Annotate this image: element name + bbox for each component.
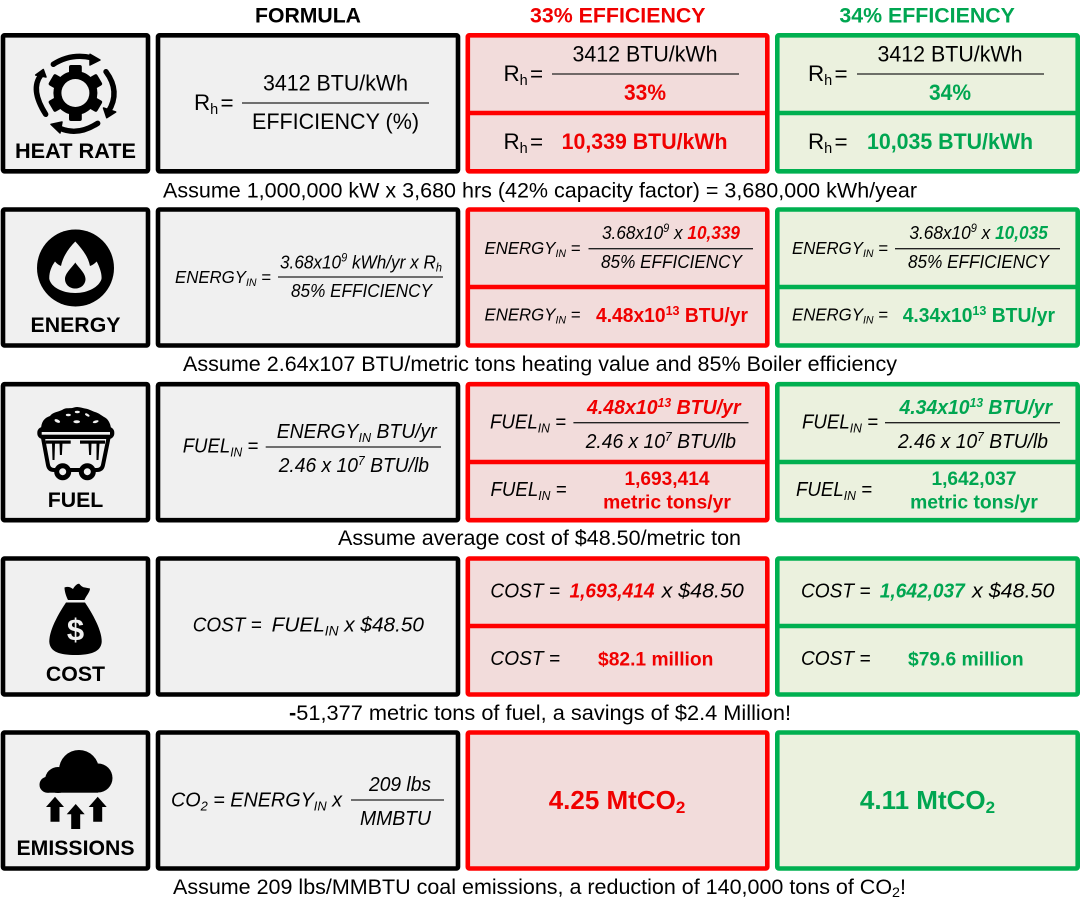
panel: heat rate formula: EFFICIENCY (%) (252, 109, 419, 134)
panel: emissions at 33% efficiency: 2 (676, 798, 685, 817)
panel: heat rate at 34% efficiency: R (808, 61, 824, 86)
panel: fuel at 33% efficiency: 4.48x10 (587, 397, 659, 419)
icon: cloud with rising arrows (40, 750, 112, 829)
panel: emissions at 34% efficiency (777, 732, 1078, 868)
label: cost: COST (46, 662, 105, 686)
panel: fuel formula: ENERGY (277, 421, 361, 443)
column heading: 33% efficiency: 33% EFFICIENCY (530, 4, 706, 28)
panel: energy at 33% efficiency: 10,339 (687, 223, 740, 243)
panel: cost formula: IN (325, 624, 339, 639)
panel: heat rate label (3, 35, 148, 171)
panel: fuel at 34% efficiency: IN (844, 488, 856, 503)
row: energy (3, 210, 1078, 346)
panel: emissions label (3, 732, 148, 868)
panel: cost formula: x $48.50 (339, 614, 425, 637)
panel: heat rate at 33% efficiency: h (520, 141, 528, 157)
panel: heat rate at 33% efficiency: h (520, 73, 528, 89)
panel: fuel at 33% efficiency: 13 (658, 396, 671, 410)
panel: energy at 33% efficiency: 13 (666, 303, 680, 318)
panel: energy formula: ENERGY (175, 267, 249, 287)
panel: energy at 33% efficiency: IN (555, 315, 566, 327)
row: emissions (3, 732, 1078, 868)
panel: fuel at 34% efficiency: 13 (970, 396, 983, 410)
icon: money bag (49, 584, 102, 655)
panel: fuel at 33% efficiency: metric tons/yr (603, 491, 731, 513)
panel: cost at 34% efficiency: COST = (801, 580, 871, 603)
panel: fuel formula: FUEL (183, 436, 234, 458)
panel: fuel formula: = (242, 436, 258, 458)
panel: fuel formula: 7 (358, 454, 366, 468)
panel: energy at 34% efficiency: 10,035 (995, 223, 1049, 243)
panel: heat rate formula: R (194, 90, 210, 115)
panel: cost formula: FUEL (272, 614, 324, 637)
panel: energy at 33% efficiency: 9 (663, 223, 670, 235)
panel: energy at 34% efficiency: = (874, 305, 888, 325)
panel: emissions formula: 209 lbs (368, 774, 431, 796)
row: cost (3, 558, 1078, 694)
panel: energy formula: kWh/yr x R (347, 253, 436, 273)
icon: gear with circular arrows (36, 54, 116, 133)
panel: energy at 34% efficiency: 9 (971, 223, 977, 235)
emissions reduction note: ! (900, 876, 906, 899)
label: fuel: FUEL (48, 488, 103, 512)
panel: heat rate at 34% efficiency: 34% (929, 80, 971, 105)
panel: heat rate formula (158, 35, 458, 171)
panel: heat rate at 34% efficiency (777, 35, 1078, 171)
column heading: formula: FORMULA (255, 4, 361, 28)
panel: energy at 33% efficiency: ENERGY (484, 305, 558, 325)
panel: fuel at 33% efficiency: 7 (665, 430, 673, 444)
panel: fuel at 33% efficiency: 2.46 x 10 (586, 431, 668, 453)
panel: energy at 33% efficiency: x (669, 223, 687, 243)
panel: heat rate formula: 3412 BTU/kWh (263, 71, 408, 96)
panel: energy at 33% efficiency: = (566, 238, 580, 258)
panel: cost formula (158, 558, 458, 694)
panel: energy at 33% efficiency: ENERGY (484, 238, 558, 258)
assumption note: fuel cost: Assume average cost of $48.50/metric ton (338, 527, 741, 550)
panel: heat rate at 33% efficiency: 33% (624, 80, 666, 105)
emissions reduction note: 2 (892, 884, 900, 900)
label: emissions: EMISSIONS (16, 836, 134, 860)
panel: cost label (3, 558, 148, 694)
panel: energy at 34% efficiency: 3.68x10 (909, 223, 973, 243)
panel: fuel at 33% efficiency: FUEL (490, 411, 541, 433)
panel: heat rate at 34% efficiency: = (828, 61, 848, 86)
panel: energy formula: IN (246, 277, 257, 289)
panel: energy at 33% efficiency (468, 210, 767, 346)
panel: fuel at 33% efficiency: IN (538, 488, 551, 503)
panel: fuel formula: BTU/lb (365, 455, 429, 477)
panel: emissions formula: CO (171, 790, 201, 812)
panel: cost formula: COST = (193, 614, 262, 637)
panel: heat rate at 33% efficiency: 10,339 BTU/kWh (562, 129, 728, 154)
panel: fuel at 33% efficiency: = (550, 411, 566, 433)
panel: fuel at 34% efficiency: 2.46 x 10 (898, 431, 980, 453)
panel: emissions formula: 2 (200, 799, 209, 814)
panel: cost at 34% efficiency: 1,642,037 (880, 581, 966, 603)
panel: emissions formula: = ENERGY (208, 790, 315, 812)
panel: cost at 33% efficiency: 1,693,414 (570, 581, 654, 603)
panel: energy at 34% efficiency: ENERGY (792, 238, 866, 258)
panel: emissions formula: MMBTU (360, 808, 432, 830)
panel: energy formula: = (257, 267, 271, 287)
panel: heat rate at 34% efficiency: R (808, 129, 824, 154)
panel: cost at 33% efficiency: x $48.50 (661, 580, 744, 603)
panel: emissions at 33% efficiency: 4.25 MtCO (549, 785, 676, 815)
panel: energy at 33% efficiency: IN (555, 248, 566, 260)
panel: cost at 34% efficiency: $79.6 million (908, 648, 1024, 670)
column heading: 34% efficiency: 34% EFFICIENCY (839, 4, 1015, 28)
panel: fuel at 34% efficiency: 4.34x10 (900, 397, 972, 419)
panel: fuel at 33% efficiency: = (550, 479, 566, 501)
panel: fuel formula: IN (358, 430, 372, 445)
panel: heat rate at 33% efficiency: = (524, 61, 543, 86)
panel: fuel at 34% efficiency: FUEL (802, 411, 853, 433)
panel: emissions at 34% efficiency: 2 (986, 798, 995, 817)
panel: energy at 34% efficiency (777, 210, 1078, 346)
panel: fuel at 34% efficiency: 7 (977, 430, 985, 444)
assumption note: heating value: Assume 2.64x107 BTU/metric tons heating value and 85% Boiler efficiency (183, 353, 897, 376)
panel: fuel at 34% efficiency: IN (850, 420, 862, 435)
panel: cost at 34% efficiency: COST = (801, 647, 871, 670)
panel: fuel at 34% efficiency: BTU/lb (984, 431, 1048, 453)
panel: energy formula: 3.68x10 (280, 253, 344, 273)
panel: energy formula (158, 210, 458, 346)
panel: cost at 33% efficiency: $82.1 million (598, 648, 713, 670)
panel: energy formula: h (436, 263, 442, 275)
panel: fuel at 33% efficiency: IN (538, 420, 550, 435)
panel: fuel at 34% efficiency (777, 384, 1078, 520)
panel: energy at 34% efficiency: 13 (972, 303, 986, 318)
panel: heat rate at 33% efficiency: R (504, 61, 520, 86)
panel: energy at 34% efficiency: IN (863, 248, 874, 260)
panel: fuel label (3, 384, 148, 520)
icon: coal cart (37, 407, 114, 478)
panel: cost at 33% efficiency (468, 558, 767, 694)
panel: heat rate at 33% efficiency (468, 35, 767, 171)
panel: fuel at 34% efficiency: = (862, 411, 878, 433)
panel: fuel at 34% efficiency: BTU/yr (983, 397, 1053, 419)
panel: emissions formula (158, 732, 458, 868)
panel: fuel at 33% efficiency: 1,693,414 (624, 468, 710, 490)
panel: energy at 34% efficiency: 4.34x10 (903, 305, 975, 327)
panel: heat rate at 34% efficiency: h (824, 141, 832, 157)
savings note: -51,377 metric tons of fuel, a savings of $2.4 Million! (289, 702, 791, 725)
panel: cost at 33% efficiency: COST = (490, 580, 560, 603)
panel: cost at 34% efficiency: x $48.50 (971, 580, 1055, 603)
panel: fuel at 33% efficiency: FUEL (490, 479, 542, 501)
panel: energy formula: 85% EFFICIENCY (291, 281, 434, 301)
panel: energy at 34% efficiency: IN (863, 315, 874, 327)
panel: heat rate at 34% efficiency: = (828, 129, 848, 154)
panel: energy at 33% efficiency: 3.68x10 (602, 223, 666, 243)
label: heat rate: HEAT RATE (15, 139, 136, 163)
panel: heat rate at 34% efficiency: 3412 BTU/kWh (878, 42, 1022, 67)
panel: fuel formula: 2.46 x 10 (279, 455, 361, 477)
panel: fuel formula (158, 384, 458, 520)
panel: energy at 34% efficiency: BTU/yr (986, 305, 1055, 327)
label: energy: ENERGY (30, 313, 120, 337)
panel: energy at 34% efficiency: 85% EFFICIENCY (908, 252, 1051, 272)
panel: energy formula: 9 (341, 253, 348, 265)
panel: energy at 33% efficiency: = (566, 305, 580, 325)
panel: emissions formula: x (327, 790, 343, 812)
panel: fuel at 33% efficiency: BTU/yr (671, 397, 742, 419)
panel: emissions at 33% efficiency (468, 732, 767, 868)
panel: fuel at 34% efficiency: 1,642,037 (932, 468, 1016, 490)
row: heat rate (3, 35, 1078, 171)
panel: cost at 34% efficiency (777, 558, 1078, 694)
panel: fuel at 34% efficiency: FUEL (796, 479, 847, 501)
panel: heat rate at 33% efficiency: = (524, 129, 543, 154)
panel: energy at 34% efficiency: ENERGY (792, 305, 866, 325)
panel: heat rate at 34% efficiency: h (824, 73, 832, 89)
panel: energy at 34% efficiency: x (977, 223, 995, 243)
panel: fuel at 33% efficiency (468, 384, 767, 520)
panel: heat rate formula: = (214, 90, 234, 115)
panel: energy at 33% efficiency: 4.48x10 (596, 305, 668, 327)
panel: energy at 34% efficiency: = (874, 238, 888, 258)
panel: fuel formula: BTU/yr (371, 421, 438, 443)
row: fuel (3, 384, 1078, 520)
assumption note: capacity: Assume 1,000,000 kW x 3,680 hrs (42% capacity factor) = 3,680,000 kWh/year (163, 180, 917, 202)
panel: emissions formula: IN (314, 799, 327, 814)
panel: emissions at 34% efficiency: 4.11 MtCO (860, 785, 986, 815)
panel: heat rate formula: h (210, 102, 218, 118)
panel: fuel at 34% efficiency: = (856, 479, 872, 501)
icon: flame in circle (37, 230, 114, 306)
panel: energy label (3, 210, 148, 346)
panel: energy at 33% efficiency: BTU/yr (680, 305, 748, 327)
panel: fuel at 34% efficiency: metric tons/yr (910, 491, 1038, 513)
panel: energy at 33% efficiency: 85% EFFICIENCY (601, 252, 744, 272)
panel: fuel formula: IN (230, 445, 243, 460)
panel: heat rate at 33% efficiency: 3412 BTU/kWh (572, 42, 718, 67)
icon: money bag: $ (67, 612, 84, 647)
panel: fuel at 33% efficiency: BTU/lb (672, 431, 736, 453)
panel: cost at 33% efficiency: COST = (490, 647, 560, 670)
panel: heat rate at 34% efficiency: 10,035 BTU/kWh (867, 129, 1033, 154)
emissions reduction note: Assume 209 lbs/MMBTU coal emissions, a reduction of 140,000 tons of CO (173, 876, 876, 899)
panel: heat rate at 33% efficiency: R (504, 129, 520, 154)
